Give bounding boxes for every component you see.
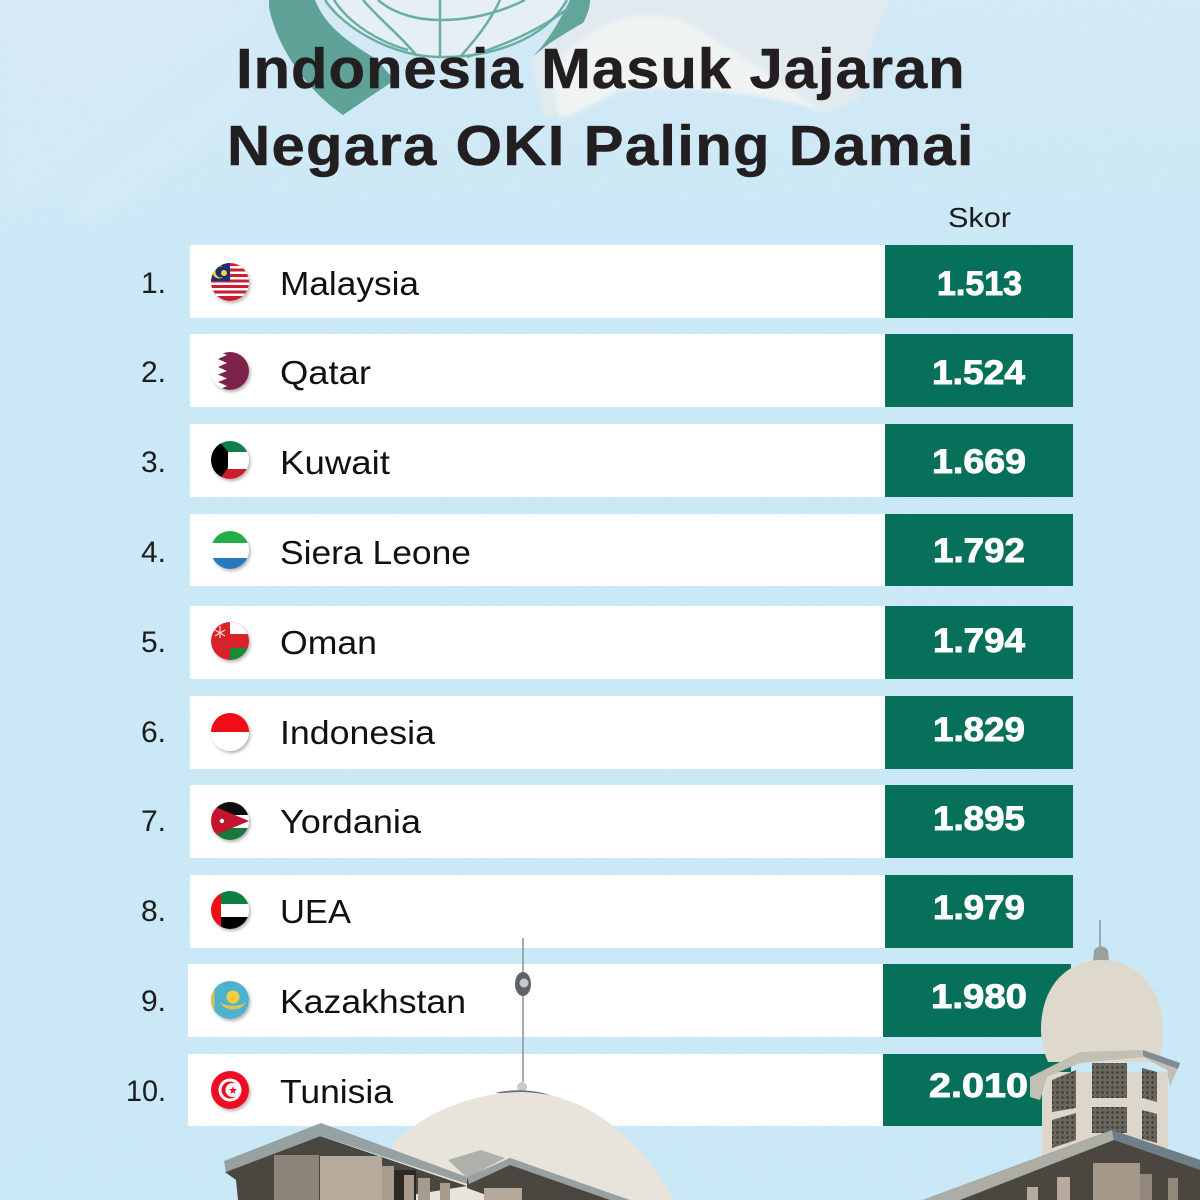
row 2: Qatar: 1.524 [932, 354, 1025, 392]
row 6: Indonesia [141, 696, 1073, 769]
row 8: UEA: 1.979 [933, 889, 1025, 927]
flag: Malaysia [211, 262, 249, 301]
row 10: Tunisia: Tunisia [280, 1073, 394, 1110]
row 4: Siera Leone: Siera Leone [280, 534, 471, 571]
row 9: Kazakhstan: 1.980 [931, 978, 1027, 1016]
row 8: UEA [141, 875, 1073, 948]
minaret right [923, 920, 1200, 1200]
title [227, 37, 974, 178]
flag: UAE [211, 891, 249, 930]
row 10: Tunisia: 10. [126, 1075, 166, 1108]
flag: Indonesia [211, 713, 249, 751]
row 7: Yordania: 7. [141, 805, 166, 838]
title: Indonesia Masuk Jajaran [236, 37, 965, 101]
row 9: Kazakhstan: Kazakhstan [280, 983, 466, 1020]
row 9: Kazakhstan [141, 964, 1071, 1037]
mosque roof left [224, 1123, 630, 1200]
row 5: Oman: 1.794 [933, 622, 1025, 660]
flag: Kuwait [211, 441, 249, 480]
row 3: Kuwait [141, 424, 1073, 497]
row 10: Tunisia [126, 1054, 1071, 1126]
row 3: Kuwait: 3. [141, 446, 166, 479]
row 7: Yordania: 1.895 [933, 800, 1025, 838]
flag: Kazakhstan [211, 981, 249, 1019]
row 5: Oman: 5. [141, 626, 166, 659]
crescent [269, 0, 395, 115]
row 4: Siera Leone [141, 514, 1073, 586]
row 8: UEA: 8. [141, 895, 166, 928]
title: Negara OKI Paling Damai [227, 114, 974, 178]
flag: Sierra Leone [211, 531, 249, 570]
row 5: Oman: Oman [280, 624, 377, 661]
row 1: Malaysia: Malaysia [280, 265, 420, 302]
row 1: Malaysia: 1. [141, 267, 166, 300]
globe lines [325, 0, 570, 58]
flag: Jordan [211, 802, 249, 841]
row 3: Kuwait: Kuwait [280, 444, 390, 481]
globe backdrop [325, 0, 567, 58]
row 7: Yordania [141, 785, 1073, 858]
row 6: Indonesia: 1.829 [933, 711, 1025, 749]
row 2: Qatar: 2. [141, 356, 166, 389]
row 10: Tunisia: 2.010 [929, 1067, 1028, 1105]
row 6: Indonesia: 6. [141, 716, 166, 749]
flag: Oman [211, 622, 249, 661]
OIC emblem in background [269, 0, 590, 115]
row 6: Indonesia: Indonesia [280, 714, 436, 751]
column header: Skor: Skor [948, 202, 1011, 233]
row 4: Siera Leone: 4. [141, 536, 166, 569]
row 3: Kuwait: 1.669 [932, 443, 1026, 481]
row 1: Malaysia [141, 245, 1073, 318]
flag: Tunisia [211, 1071, 249, 1109]
mosque main dome with spire [393, 938, 674, 1200]
flag: Qatar [211, 352, 249, 390]
row 7: Yordania: Yordania [280, 803, 422, 840]
row 8: UEA: UEA [280, 893, 351, 930]
row 2: Qatar: Qatar [280, 354, 371, 391]
row 4: Siera Leone: 1.792 [933, 532, 1025, 570]
row 5: Oman [141, 606, 1073, 679]
row 2: Qatar [141, 334, 1073, 407]
row 9: Kazakhstan: 9. [141, 985, 166, 1018]
row 1: Malaysia: 1.513 [937, 265, 1022, 303]
